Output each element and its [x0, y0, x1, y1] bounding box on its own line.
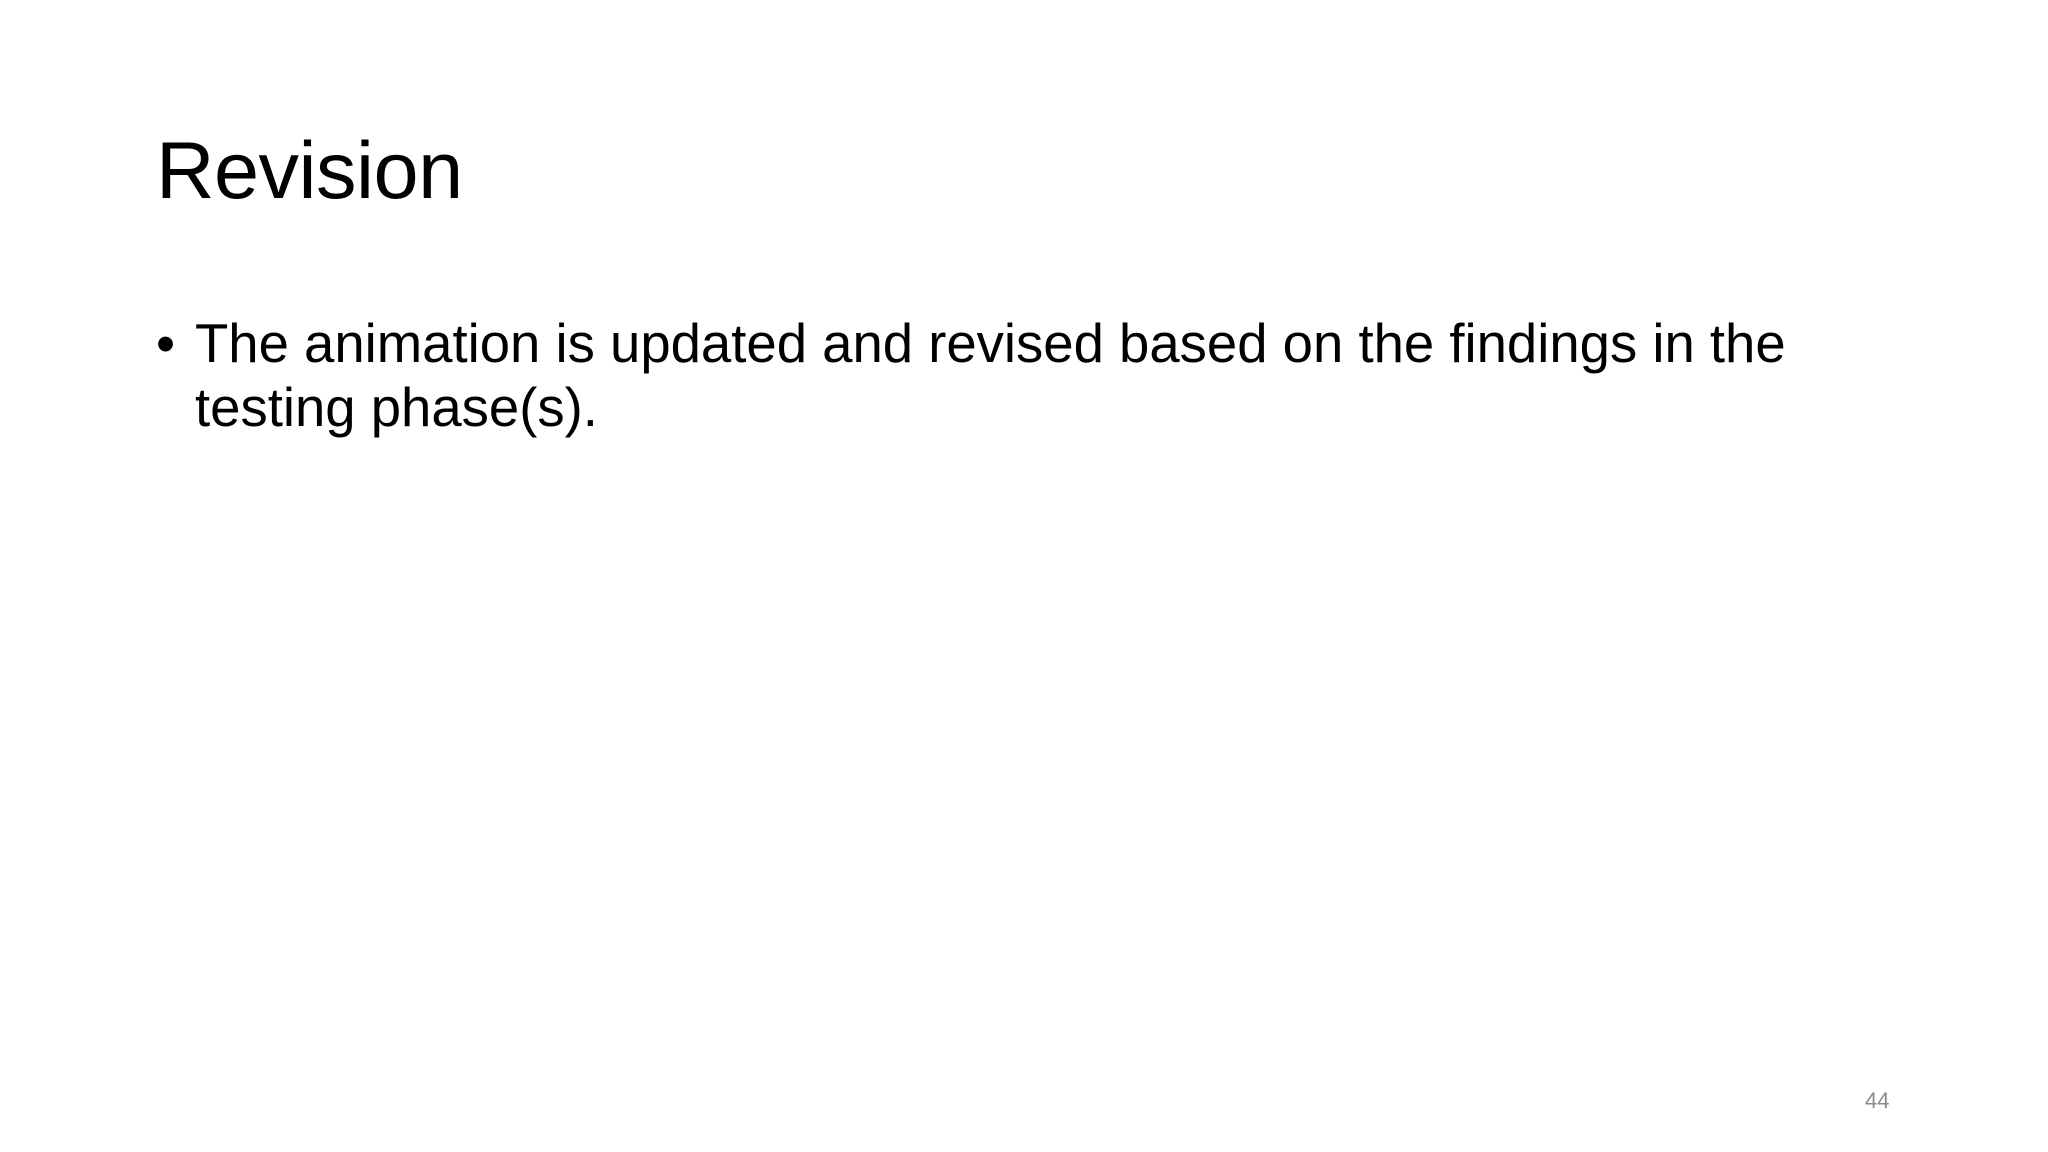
bullet text: [195, 313, 1786, 438]
title: Revision: [156, 126, 463, 216]
page number: 44: [1865, 1088, 1889, 1113]
bullet text: testing phase(s).: [195, 377, 598, 438]
bullet text: The animation is updated and revised based on the findings in the: [195, 313, 1786, 374]
bullet marker: •: [156, 313, 175, 374]
bullet text block: [156, 313, 1786, 438]
